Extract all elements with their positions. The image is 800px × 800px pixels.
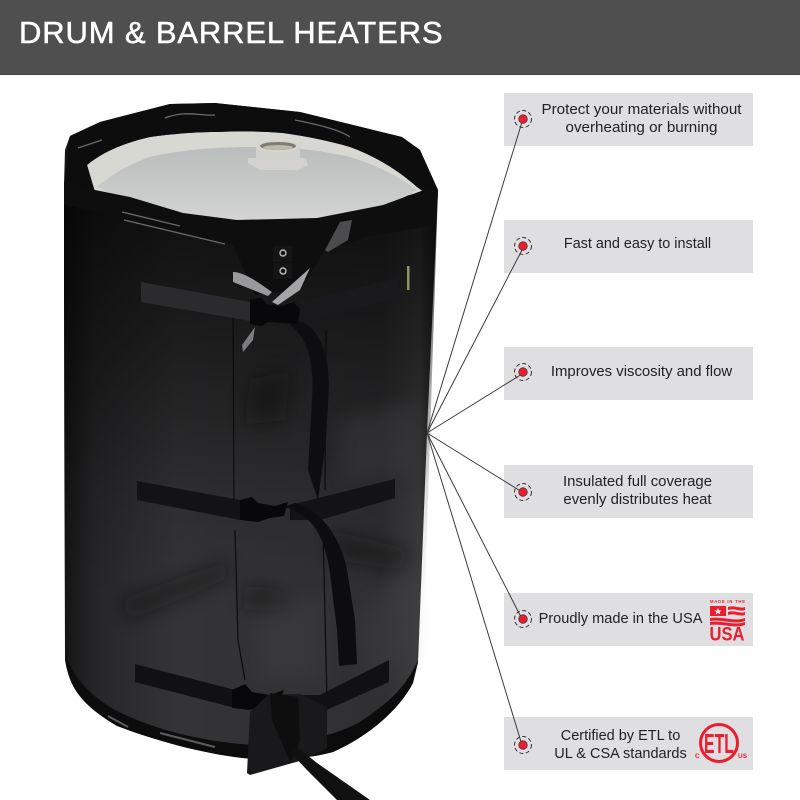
feature box: certified ETL	[504, 717, 753, 770]
middle strap	[137, 479, 395, 520]
bung cap	[248, 140, 308, 178]
hem glints	[108, 716, 215, 747]
feature box: certified ETL: Certified by ETL to	[561, 728, 680, 744]
feature box: protect materials	[504, 93, 753, 146]
flap glints	[233, 272, 272, 296]
buckle top	[250, 298, 300, 326]
fabric wrinkles	[120, 370, 410, 620]
hanging strap middle	[283, 503, 357, 666]
leader lines	[427, 122, 522, 745]
icon: made in the USA flag: MADE IN THE	[710, 599, 745, 604]
buckle middle	[240, 497, 288, 522]
feature box: insulated coverage: Insulated full coverage	[563, 474, 712, 490]
top label mark	[407, 266, 410, 290]
lower strap	[135, 660, 389, 713]
hanging strap top	[290, 320, 329, 500]
icon: made in the USA flag	[710, 599, 745, 646]
feature box: insulated coverage	[504, 465, 753, 518]
top collar back	[64, 103, 438, 192]
feature box: certified ETL: UL & CSA standards	[554, 746, 687, 762]
collar highlight	[325, 220, 352, 252]
bottom flap	[247, 694, 327, 775]
marker 3	[514, 364, 532, 380]
header band	[0, 0, 800, 75]
feature box: insulated coverage: evenly distributes heat	[563, 492, 712, 508]
buckle lower	[232, 684, 284, 710]
feature box: made in USA	[504, 593, 753, 646]
feature box: made in USA: Proudly made in the USA	[539, 611, 702, 627]
feature box: easy install	[504, 220, 753, 273]
top collar front	[64, 182, 438, 295]
marker 4	[514, 484, 532, 500]
feature box: protect materials: overheating or burning	[566, 119, 717, 136]
drum rim	[87, 131, 424, 228]
icon: made in the USA flag: USA	[710, 624, 745, 646]
wrap body	[64, 103, 438, 759]
grommets	[273, 246, 292, 279]
center flap seams	[233, 300, 327, 700]
icon: ETL listed mark	[695, 724, 748, 762]
drum heater	[64, 103, 438, 800]
feature box: protect materials: Protect your materials without	[541, 101, 742, 118]
title: DRUM & BARREL HEATERS	[19, 15, 443, 50]
icon: ETL listed mark: US	[738, 753, 748, 760]
collar glints	[78, 114, 350, 244]
bottom hem	[65, 655, 418, 759]
top strap	[141, 278, 398, 322]
marker 5	[514, 610, 532, 628]
feature box: viscosity: Improves viscosity and flow	[551, 364, 732, 380]
marker 1	[514, 110, 532, 128]
drum lid	[97, 147, 417, 224]
icon: ETL listed mark: C	[695, 753, 700, 760]
feature box: easy install: Fast and easy to install	[564, 236, 711, 252]
icon: ETL listed mark: ETL	[704, 728, 734, 759]
marker 2	[514, 238, 532, 254]
feature box: viscosity	[504, 347, 753, 400]
bottom strap	[290, 748, 370, 800]
marker 6	[514, 736, 532, 754]
